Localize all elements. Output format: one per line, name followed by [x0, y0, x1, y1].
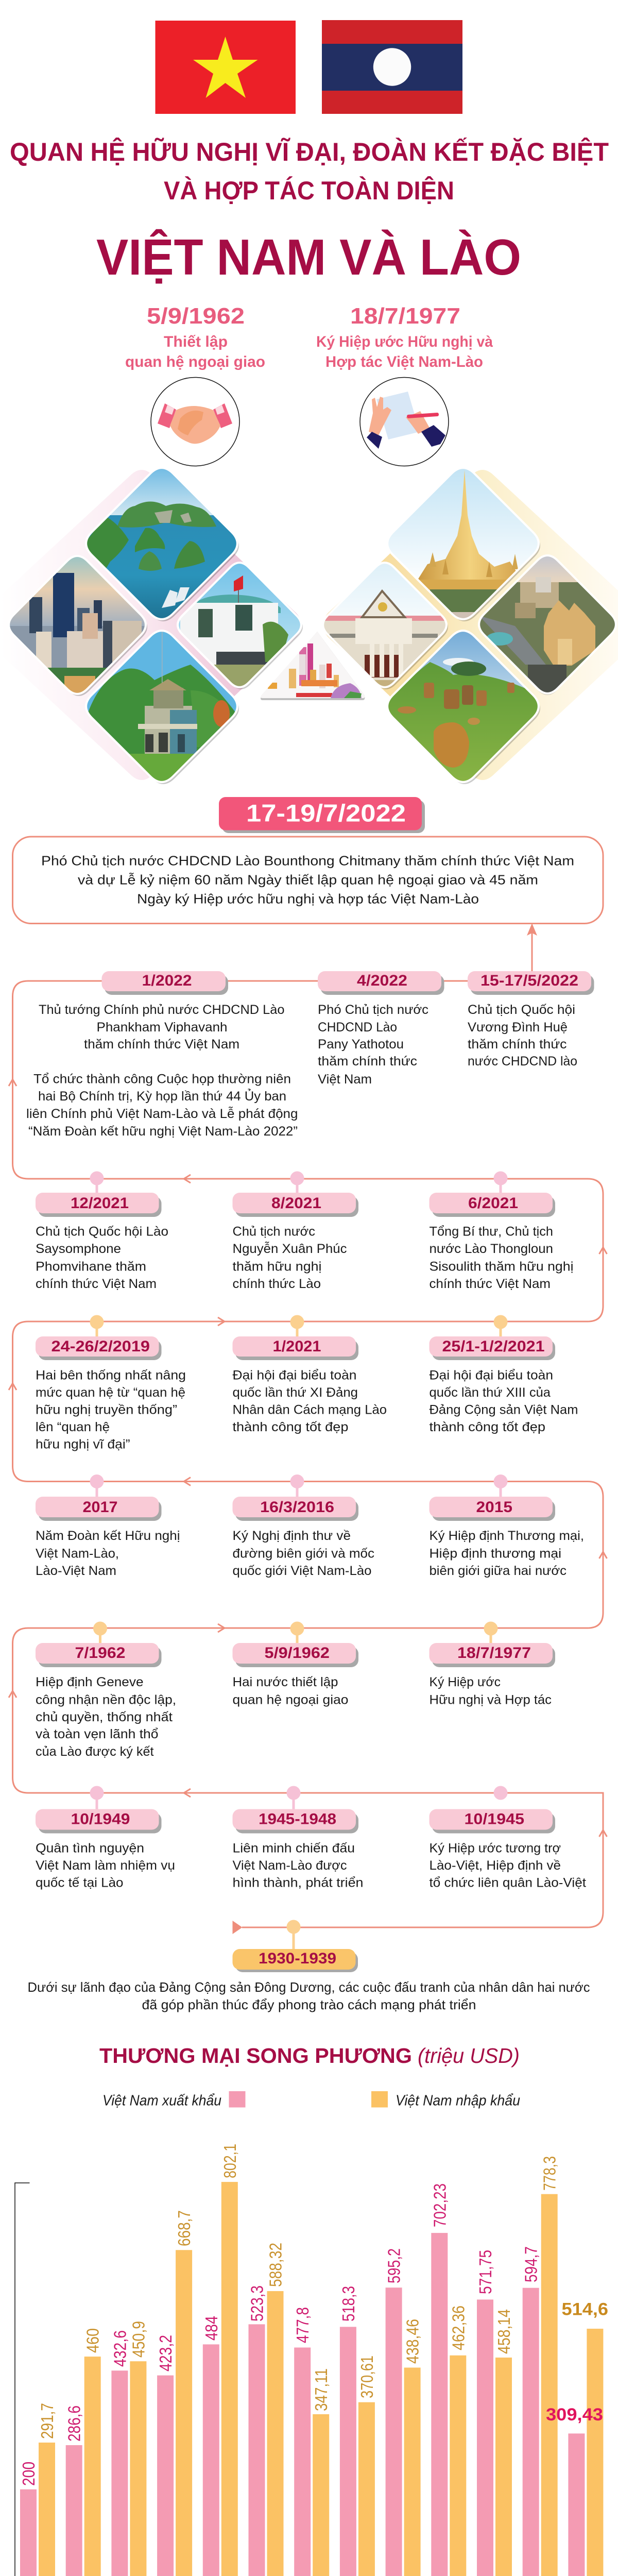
event: 1930-1939: 1930-1939 — [259, 1950, 336, 1967]
bars 2015 — [248, 2291, 283, 2576]
event: 2017: Lào-Việt Nam — [36, 1564, 116, 1578]
bars 2010 — [20, 2443, 55, 2576]
photo: Patuxai — [474, 551, 618, 699]
event: 4/2022: thăm chính thức — [318, 1054, 417, 1069]
event: 5/9/1962: quan hệ ngoại giao — [233, 1693, 348, 1707]
bar value labels: 438,46 — [403, 2319, 422, 2364]
event: 10/1949 — [36, 1786, 175, 1890]
event: 1/2021: Đại hội đại biểu toàn — [233, 1368, 356, 1383]
event: 16/3/2016: quốc giới Việt Nam-Lào — [233, 1564, 372, 1578]
event: 7/1962 — [36, 1622, 176, 1759]
photo: Hanoi skyline — [10, 555, 147, 696]
milestone: 5/9/1962: 5/9/1962 — [147, 303, 245, 329]
bar value labels: 571,75 — [476, 2250, 495, 2294]
event: 2015: Ký Hiệp định Thương mại, — [430, 1529, 584, 1543]
event: 1945-1948 — [233, 1786, 364, 1890]
event: 2015: Hiệp định thương mại — [430, 1547, 561, 1561]
bar value labels: 309,43 — [546, 2405, 603, 2425]
event: 10/1945: tổ chức liên quân Lào-Việt — [430, 1875, 586, 1890]
bar value labels: 702,23 — [430, 2183, 449, 2227]
event: 5/9/1962: Hai nước thiết lập — [233, 1675, 338, 1689]
bar value labels: 462,36 — [449, 2306, 468, 2350]
event: 25/1-1/2/2021 — [430, 1315, 578, 1434]
title — [10, 137, 609, 285]
event: 7/1962: công nhận nền độc lập, — [36, 1693, 176, 1707]
event: 1/2022: liên Chính phủ Việt Nam-Lào và Lễ phát động — [26, 1106, 298, 1121]
event: 1/2021 — [233, 1315, 387, 1434]
photo: National Assembly of Laos — [318, 559, 451, 689]
event: 18/7/1977: 18/7/1977 — [457, 1645, 531, 1662]
flag: Laos — [322, 20, 462, 114]
milestone: 18/7/1977: Ký Hiệp ước Hữu nghị và — [316, 333, 493, 350]
event: 5/9/1962: 5/9/1962 — [265, 1645, 330, 1662]
event: 10/1945: Lào-Việt, Hiệp định về — [430, 1858, 561, 1873]
photo: economy chart — [261, 632, 365, 700]
event: 10/1949: Quân tình nguyện — [36, 1841, 144, 1856]
event: 24-26/2/2019: Hai bên thống nhất nâng — [36, 1368, 186, 1383]
bar value labels: 484 — [202, 2316, 221, 2341]
event: 15-17/5/2022: 15-17/5/2022 — [480, 972, 578, 989]
bar value labels — [19, 2144, 608, 2486]
panel: 17-19/7/2022 event — [12, 837, 603, 923]
event: 2015 — [430, 1475, 584, 1578]
bars 2021 — [523, 2194, 558, 2576]
panel: background shape Laos — [322, 470, 618, 780]
event: 1945-1948: hình thành, phát triển — [233, 1875, 364, 1890]
event: 12/2021: Chủ tịch Quốc hội Lào — [36, 1224, 168, 1239]
title line 3: VIỆT NAM VÀ LÀO — [96, 229, 521, 285]
event: 1/2021: 1/2021 — [273, 1338, 321, 1355]
bars 2014 — [203, 2182, 238, 2576]
event: 7/1962: và toàn vẹn lãnh thổ — [36, 1727, 159, 1741]
event: 15-17/5/2022: Vương Đình Huệ — [468, 1020, 568, 1035]
bars 2020 — [477, 2299, 512, 2576]
legend: Việt Nam nhập khẩu — [396, 2093, 520, 2109]
title line 2: VÀ HỢP TÁC TOÀN DIỆN — [164, 176, 454, 205]
bar value labels: 594,7 — [522, 2246, 541, 2282]
milestone: 5/9/1962 — [125, 303, 265, 370]
bar chart — [20, 2182, 603, 2576]
bars 2017 — [340, 2327, 375, 2576]
event: 1/2022: Phankham Viphavanh — [97, 1020, 228, 1035]
photo: Plain of Jars — [388, 630, 540, 784]
event: 12/2021 — [36, 1172, 168, 1291]
event: 16/3/2016 — [233, 1475, 374, 1578]
event: 12/2021: chính thức Việt Nam — [36, 1277, 157, 1291]
icon: handshake — [151, 377, 239, 466]
event: 4/2022: Pany Yathotou — [318, 1037, 404, 1052]
event: 24-26/2/2019: hữu nghị vĩ đại” — [36, 1437, 130, 1452]
event: 10/1949: Việt Nam làm nhiệm vụ — [36, 1858, 175, 1873]
milestone: 5/9/1962: quan hệ ngoại giao — [125, 353, 265, 370]
event: 1930-1939: Dưới sự lãnh đạo của Đảng Cộng sản Đông Dương, các cuộc đấu tranh của nhân dân hai nước — [28, 1979, 590, 1995]
event: 8/2021: Chủ tịch nước — [233, 1224, 315, 1239]
photo: National Assembly of Vietnam — [173, 559, 306, 690]
bar value labels: 595,2 — [385, 2248, 404, 2283]
event: 8/2021: 8/2021 — [271, 1195, 321, 1212]
event: 4/2022: CHDCND Lào — [318, 1020, 397, 1035]
milestone: 18/7/1977 — [316, 303, 493, 370]
bar value labels: 458,14 — [494, 2309, 513, 2354]
event: 4/2022: Việt Nam — [318, 1072, 372, 1087]
event: 2017 — [36, 1475, 180, 1578]
event: 24-26/2/2019 — [36, 1315, 186, 1452]
bar value labels: 523,3 — [247, 2285, 267, 2321]
event: 1/2022: Thủ tướng Chính phủ nước CHDCND Lào — [39, 1003, 284, 1017]
event: 8/2021: thăm hữu nghị — [233, 1259, 321, 1274]
title line 1: QUAN HỆ HỮU NGHỊ VĨ ĐẠI, ĐOÀN KẾT ĐẶC BIỆT — [10, 137, 609, 166]
bars 2011 — [66, 2357, 101, 2576]
event: 1/2021: Nhân dân Cách mạng Lào — [233, 1402, 387, 1417]
legend — [102, 2091, 520, 2109]
event: 25/1-1/2/2021: thành công tốt đẹp — [430, 1420, 545, 1434]
event: 1/2022: thăm chính thức Việt Nam — [84, 1037, 239, 1052]
event: 2015: biên giới giữa hai nước — [430, 1564, 566, 1578]
bar value labels: 588,32 — [266, 2243, 285, 2287]
bar value labels: 460 — [83, 2328, 102, 2353]
event: 10/1945: 10/1945 — [465, 1810, 524, 1828]
chart title: THƯƠNG MẠI SONG PHƯƠNG — [99, 2044, 412, 2067]
chart axes — [15, 2183, 609, 2576]
timeline path with arrows — [9, 923, 607, 1934]
bar value labels: 802,1 — [220, 2144, 239, 2178]
bar value labels: 423,2 — [156, 2335, 175, 2371]
photo: That Luang — [388, 469, 540, 621]
event: 4/2022: Phó Chủ tịch nước — [318, 1003, 428, 1017]
date badge: 17-19/7/2022 — [219, 797, 425, 833]
icon: signing document — [360, 377, 449, 466]
bar value labels: 347,11 — [312, 2368, 331, 2411]
legend: Việt Nam xuất khẩu — [102, 2093, 221, 2109]
event: 12/2021: Phomvihane thăm — [36, 1259, 146, 1274]
photo: Turtle Tower — [80, 626, 243, 785]
bar value labels: 514,6 — [561, 2300, 608, 2319]
bar value labels: 291,7 — [38, 2403, 57, 2439]
event: 25/1-1/2/2021: Đại hội đại biểu toàn — [430, 1368, 553, 1383]
event: 8/2021: Nguyễn Xuân Phúc — [233, 1241, 347, 1256]
event: 4/2022 — [318, 971, 444, 1087]
event: 10/1945 — [430, 1786, 586, 1890]
event: 15-17/5/2022: Chủ tịch Quốc hội — [468, 1003, 575, 1017]
milestone: 18/7/1977: 18/7/1977 — [350, 303, 460, 329]
event: 6/2021: 6/2021 — [468, 1195, 518, 1212]
event: 6/2021 — [430, 1172, 574, 1291]
bar value labels: 432,6 — [110, 2330, 129, 2367]
bars 2019 — [431, 2233, 466, 2576]
bar value labels: 477,8 — [293, 2307, 312, 2343]
event: 24-26/2/2019: lên “quan hệ — [36, 1420, 110, 1434]
event: 8/2021 — [233, 1172, 358, 1291]
event: 16/3/2016: 16/3/2016 — [260, 1499, 334, 1516]
event: 1/2022: 1/2022 — [142, 972, 192, 989]
event: 15-17/5/2022: thăm chính thức — [468, 1037, 566, 1052]
bars 2022 — [568, 2329, 603, 2576]
event: 16/3/2016: đường biên giới và mốc — [233, 1547, 374, 1561]
event: 1/2021: thành công tốt đẹp — [233, 1420, 348, 1434]
event: 18/7/1977: Hữu nghị và Hợp tác — [430, 1693, 552, 1707]
event: 8/2021: chính thức Lào — [233, 1277, 321, 1291]
event: 6/2021: chính thức Việt Nam — [430, 1277, 551, 1291]
event: 1/2022: Tổ chức thành công Cuộc họp thường niên — [33, 1072, 291, 1086]
event: 15-17/5/2022 — [468, 971, 594, 1069]
event: 6/2021: Sisoulith thăm hữu nghị — [430, 1259, 574, 1274]
event: 24-26/2/2019: 24-26/2/2019 — [52, 1338, 150, 1355]
event: 6/2021: Tổng Bí thư, Chủ tịch — [430, 1224, 553, 1239]
event: 1/2021: quốc lần thứ XI Đảng — [233, 1385, 358, 1400]
event: 2017: Việt Nam-Lào, — [36, 1547, 119, 1561]
bars 2012 — [111, 2361, 146, 2576]
event: 1930-1939: đã góp phần thúc đẩy phong trào cách mạng phát triển — [142, 1997, 476, 2012]
event: 16/3/2016: Ký Nghị định thư về — [233, 1529, 351, 1543]
event: 7/1962: Hiệp định Geneve — [36, 1675, 143, 1689]
panel: 17-19/7/2022 event: Phó Chủ tịch nước CHDCND Lào Bounthong Chitmany thăm chính thức Việt Nam — [41, 853, 574, 869]
milestone: 5/9/1962: Thiết lập — [164, 333, 228, 350]
event: 18/7/1977: Ký Hiệp ước — [430, 1675, 501, 1689]
event: 10/1949: 10/1949 — [71, 1810, 130, 1828]
bar value labels: 518,3 — [339, 2286, 358, 2321]
event: 25/1-1/2/2021: 25/1-1/2/2021 — [442, 1338, 545, 1355]
bar value labels: 200 — [19, 2462, 38, 2486]
event: 2017: 2017 — [82, 1499, 117, 1516]
event: 4/2022: 4/2022 — [357, 972, 407, 989]
event: 10/1945: Ký Hiệp ước tương trợ — [430, 1841, 561, 1856]
bar value labels: 778,3 — [540, 2156, 559, 2191]
event: 5/9/1962 — [233, 1622, 358, 1707]
milestone: 18/7/1977: Hợp tác Việt Nam-Lào — [325, 353, 483, 370]
event: 10/1949: quốc tế tại Lào — [36, 1875, 124, 1890]
event: 1/2022 — [26, 971, 298, 1139]
bar value labels: 668,7 — [175, 2210, 194, 2246]
panel: 17-19/7/2022 event: và dự Lễ kỷ niệm 60 năm Ngày thiết lập quan hệ ngoại giao và 45 năm — [78, 872, 538, 887]
chart title: (triệu USD) — [418, 2044, 520, 2067]
event: 24-26/2/2019: hữu nghị truyền thống” — [36, 1402, 177, 1417]
bar value labels: 450,9 — [129, 2321, 148, 2358]
panel: 17-19/7/2022 event: Ngày ký Hiệp ước hữu nghị và hợp tác Việt Nam-Lào — [137, 891, 479, 907]
event: 7/1962: 7/1962 — [75, 1645, 126, 1662]
event: 1/2022: “Năm Đoàn kết hữu nghị Việt Nam-Lào 2022” — [28, 1124, 298, 1139]
bars 2016 — [294, 2347, 329, 2576]
event: 12/2021: Saysomphone — [36, 1242, 121, 1256]
event: 7/1962: của Lào được ký kết — [36, 1744, 154, 1759]
bars 2018 — [386, 2287, 421, 2576]
bars 2013 — [157, 2250, 192, 2576]
event: 12/2021: 12/2021 — [71, 1195, 129, 1212]
event: 18/7/1977 — [430, 1622, 555, 1707]
bar value labels: 286,6 — [65, 2405, 84, 2442]
event: 24-26/2/2019: mức quan hệ từ “quan hệ — [36, 1385, 185, 1400]
flag: Vietnam — [156, 21, 296, 114]
event: 7/1962: chủ quyền, thống nhất — [36, 1710, 173, 1724]
event: 25/1-1/2/2021: Đảng Cộng sản Việt Nam — [430, 1402, 578, 1417]
event: 2017: Năm Đoàn kết Hữu nghị — [36, 1529, 180, 1543]
event: 15-17/5/2022: nước CHDCND lào — [468, 1054, 577, 1069]
event: 25/1-1/2/2021: quốc lần thứ XIII của — [430, 1385, 551, 1400]
event: 1945-1948: Liên minh chiến đấu — [233, 1841, 355, 1856]
panel: background shape Vietnam — [0, 470, 302, 780]
date badge: 17-19/7/2022: 17-19/7/2022 — [246, 800, 406, 826]
event: 1945-1948: 1945-1948 — [259, 1810, 336, 1828]
bar value labels: 370,61 — [357, 2355, 376, 2398]
photo: Ha Long bay — [85, 469, 239, 621]
event: 6/2021: nước Lào Thongloun — [430, 1242, 553, 1256]
event: 2015: 2015 — [476, 1499, 512, 1516]
event: 1930-1939 — [28, 1920, 590, 2012]
event: 1/2022: hai Bộ Chính trị, Kỳ họp lần thứ 44 Ủy ban — [38, 1088, 286, 1104]
event: 1945-1948: Việt Nam-Lào được — [233, 1858, 347, 1873]
